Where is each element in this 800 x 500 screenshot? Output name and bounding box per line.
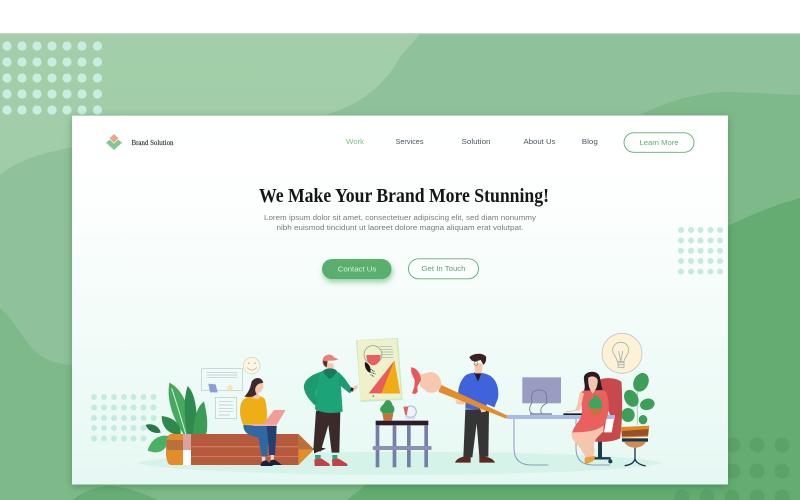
- description: Lorem ipsum dolor sit amet, consectetuer adipiscing elit, sed diam nonummy: [264, 213, 536, 222]
- illustration: left group: [146, 355, 358, 466]
- navigation: About Us: [524, 137, 556, 146]
- navigation: Work: [346, 137, 364, 146]
- navigation: Solution: [462, 137, 490, 146]
- button: learn more: Learn More: [640, 138, 678, 147]
- dot grid: bottom right: [674, 438, 790, 500]
- side table: [373, 421, 432, 467]
- chair: [587, 378, 622, 463]
- man with paintbrush: [455, 354, 498, 463]
- card stickers: [208, 384, 233, 392]
- logo text: Brand Solution: [132, 139, 174, 147]
- potted plant: [380, 400, 394, 421]
- logo icon: [106, 134, 122, 150]
- dot grid: panel right: [678, 227, 723, 274]
- plants behind pencil: [146, 383, 207, 452]
- monitor: [522, 377, 561, 415]
- illustration: right group: [507, 333, 656, 466]
- pencil: [166, 434, 326, 465]
- button: learn more: [624, 133, 694, 152]
- poster: [356, 338, 403, 402]
- keyboard: [563, 413, 592, 415]
- navigation: Blog: [582, 137, 598, 146]
- illustration: centre group: [356, 338, 508, 467]
- ground ellipse: [137, 452, 662, 475]
- button: contact us: Contact Us: [338, 264, 377, 274]
- title: We Make Your Brand More Stunning!: [259, 185, 549, 207]
- description: [264, 213, 536, 232]
- button: get in touch: [408, 259, 478, 279]
- man in hoodie: [304, 355, 358, 466]
- large plant: [621, 370, 656, 466]
- brush: [411, 367, 508, 419]
- navigation: [346, 137, 598, 146]
- panel: landing page card: [72, 116, 728, 484]
- cup: [403, 406, 416, 419]
- woman with laptop: [240, 378, 286, 466]
- dot grid: panel left: [91, 394, 156, 442]
- button: contact us: [322, 259, 392, 279]
- button: get in touch: Get In Touch: [422, 264, 466, 273]
- seated woman: [565, 372, 609, 464]
- description: nibh euismod tincidunt ut laoreet dolore magna aliquam erat volutpat.: [276, 223, 524, 232]
- desk: [507, 415, 615, 465]
- smiley: [243, 357, 260, 374]
- light bulb: [602, 333, 642, 373]
- navigation: Services: [396, 137, 424, 146]
- document: [215, 397, 237, 419]
- dot grid: top left: [2, 41, 102, 115]
- note card: [202, 369, 242, 391]
